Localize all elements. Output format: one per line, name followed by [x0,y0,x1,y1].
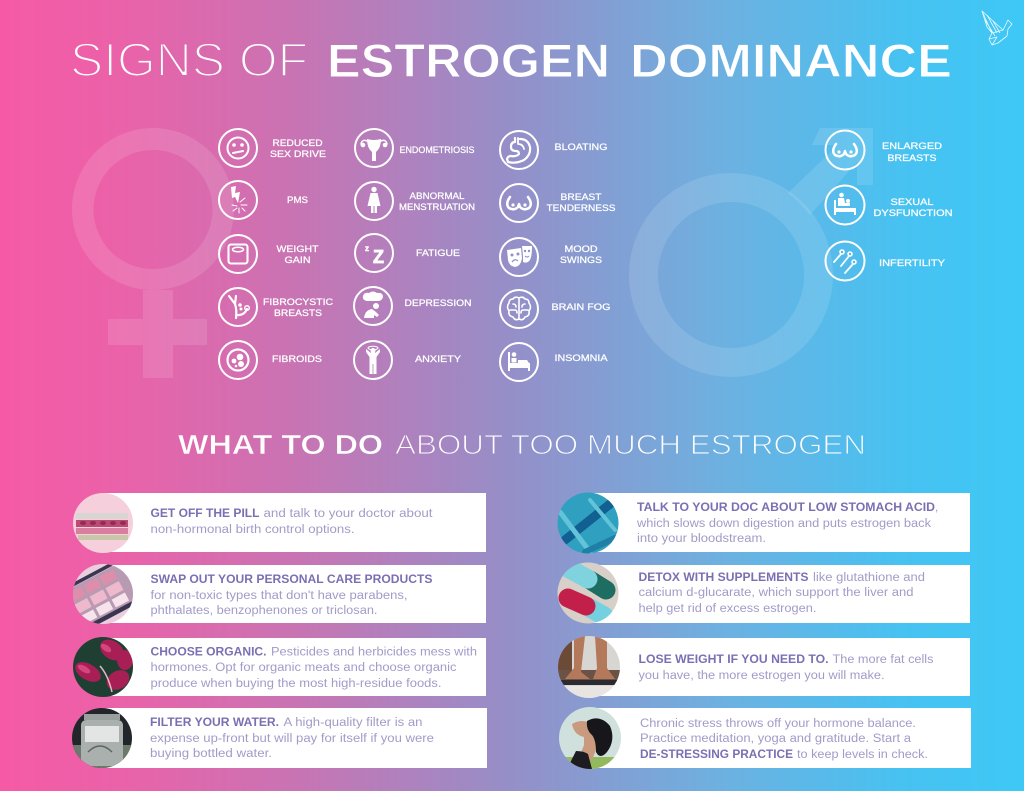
photo: bacteria [557,492,619,554]
icon: sperm [826,242,864,280]
watermark: female symbol [72,128,234,378]
photo: water jar [72,708,132,770]
text: like glutathione and [813,572,925,584]
icon: theatre masks [500,238,538,276]
text [150,508,433,536]
icon: sleep Z [355,234,393,272]
symptom: fibroids: FIBROIDS [272,353,322,364]
text: , [935,502,938,514]
icon: brain [500,290,538,328]
text [636,502,938,545]
symptom: infertility: INFERTILITY [879,257,946,268]
text: non-hormonal birth control options. [150,524,354,536]
icon: person in bed [500,343,538,381]
symptom: enlarged breasts: BREASTS [888,152,936,163]
symptom: endometriosis: ENDOMETRIOSIS [400,144,474,155]
symptom: anxiety: ANXIETY [415,353,462,364]
text: CHOOSE ORGANIC. [150,646,266,658]
symptom: endometriosis [355,129,474,167]
panel: lose weight [558,636,970,698]
symptom: abnormal menstruation: ABNORMAL [410,190,464,201]
symptom: mood swings [500,238,602,276]
symptom: fatigue [355,234,460,272]
icon: sleep Z: Z [373,247,384,267]
symptom: weight gain: GAIN [284,254,310,265]
icon: person under cloud [354,287,392,325]
text [640,718,928,761]
icon: lightning bolt [219,181,257,219]
symptom: mood swings: MOOD [564,243,598,254]
logo: dove [982,11,1012,45]
title: DOMINANCE [630,34,952,87]
icon: neutral face [219,129,257,167]
icon: standing person [354,341,392,379]
text: Pesticides and herbicides mess with [271,646,477,658]
text: produce when buying the most high-residue foods. [150,678,442,690]
symptom: reduced sex drive: SEX DRIVE [270,148,326,159]
icon: stomach [500,131,538,169]
symptom: sexual dysfunction [826,186,952,224]
symptom: reduced sex drive [219,129,326,167]
icon: cells [219,341,257,379]
text: The more fat cells [832,654,934,666]
panel: get off the pill [73,493,486,553]
text: TALK TO YOUR DOC ABOUT LOW STOMACH ACID [637,502,935,514]
text: LOSE WEIGHT IF YOU NEED TO. [638,654,828,666]
symptom: abnormal menstruation: MENSTRUATION [399,201,475,212]
symptom: fatigue: FATIGUE [416,247,460,258]
text: for non-toxic types that don't have parabens, [150,590,408,602]
photo: feet on scale [558,636,620,698]
panel: detox with supplements [557,562,970,624]
symptom: weight gain: WEIGHT [276,243,319,254]
text [150,717,434,760]
symptom: breast tenderness: TENDERNESS [546,202,616,213]
text: expense up-front but will pay for itself if you were [150,733,434,745]
symptom: fibrocystic breasts [219,288,333,326]
section heading: ABOUT TOO MUCH ESTROGEN [395,429,866,460]
symptom: fibrocystic breasts: BREASTS [274,307,322,318]
text [638,572,925,615]
symptom: PMS [219,181,308,219]
symptom: mood swings: SWINGS [560,254,602,265]
symptom: sexual dysfunction: DYSFUNCTION [874,207,952,218]
panel: de-stressing practice [559,707,971,769]
symptom: abnormal menstruation [355,182,475,220]
symptom: enlarged breasts [826,130,942,170]
icon: woman silhouette [355,182,393,220]
symptom: infertility [826,242,946,280]
text [150,646,477,690]
icon: uterus [355,129,393,167]
title [70,33,952,87]
symptom: bloating: BLOATING [554,141,608,152]
text: buying bottled water. [150,748,272,760]
panel: filter your water [72,708,487,770]
symptom: reduced sex drive: REDUCED [272,137,323,148]
symptom: brain fog: BRAIN FOG [552,301,610,312]
text: into your bloodstream. [637,533,766,545]
icon: breasts [500,184,538,222]
icon: breast ducts [219,288,257,326]
photo: pills [73,493,133,553]
symptom: breast tenderness [500,184,616,222]
section heading [178,429,866,460]
symptom: brain fog [500,290,610,328]
text: GET OFF THE PILL [150,508,260,520]
icon: breasts [826,130,864,170]
panel: low stomach acid [557,492,970,554]
symptom: breast tenderness: BREAST [560,191,602,202]
symptom: enlarged breasts: ENLARGED [882,140,942,151]
watermark: male symbol [629,128,873,377]
text: phthalates, benzophenones or triclosan. [150,605,378,617]
text: calcium d-glucarate, which support the liver and [638,587,914,599]
symptom: weight gain [219,235,319,273]
text: A high-quality filter is an [284,717,422,729]
text [150,574,433,617]
panel: choose organic [72,635,486,697]
section heading: WHAT TO DO [178,429,383,460]
text [638,654,934,682]
symptom: depression [354,287,472,325]
symptom: sexual dysfunction: SEXUAL [890,196,934,207]
symptom: anxiety [354,341,462,379]
text: FILTER YOUR WATER. [150,717,279,729]
icon: scale [219,235,257,273]
title: SIGNS OF [70,33,308,86]
text: SWAP OUT YOUR PERSONAL CARE PRODUCTS [150,574,433,586]
photo: radishes [72,635,133,697]
text: Practice meditation, yoga and gratitude. Start a [640,733,912,745]
title: ESTROGEN [327,34,610,87]
symptom: fibroids [219,341,322,379]
text: Chronic stress throws off your hormone balance. [640,718,916,730]
icon: sleep Z: z [365,244,369,253]
icon: couple in bed [826,186,864,224]
text: DE-STRESSING PRACTICE [640,749,793,761]
symptom: insomnia [500,343,608,381]
text: help get rid of excess estrogen. [638,603,816,615]
panel: swap personal care products [73,564,486,624]
photo: woman breathing [559,707,621,769]
text: you have, the more estrogen you will make. [638,670,884,682]
text: which slows down digestion and puts estrogen back [636,518,931,530]
symptom: bloating [500,131,608,169]
symptom: depression: DEPRESSION [404,297,472,308]
text: hormones. Opt for organic meats and choose organic [150,662,457,674]
text: DETOX WITH SUPPLEMENTS [638,572,809,584]
symptom: insomnia: INSOMNIA [554,352,608,363]
symptom: fibrocystic breasts: FIBROCYSTIC [263,296,333,307]
photo: capsules [557,562,619,624]
symptom: PMS: PMS [287,194,308,205]
photo: makeup palette [73,564,133,624]
text: to keep levels in check. [797,749,928,761]
text: and talk to your doctor about [264,508,433,520]
